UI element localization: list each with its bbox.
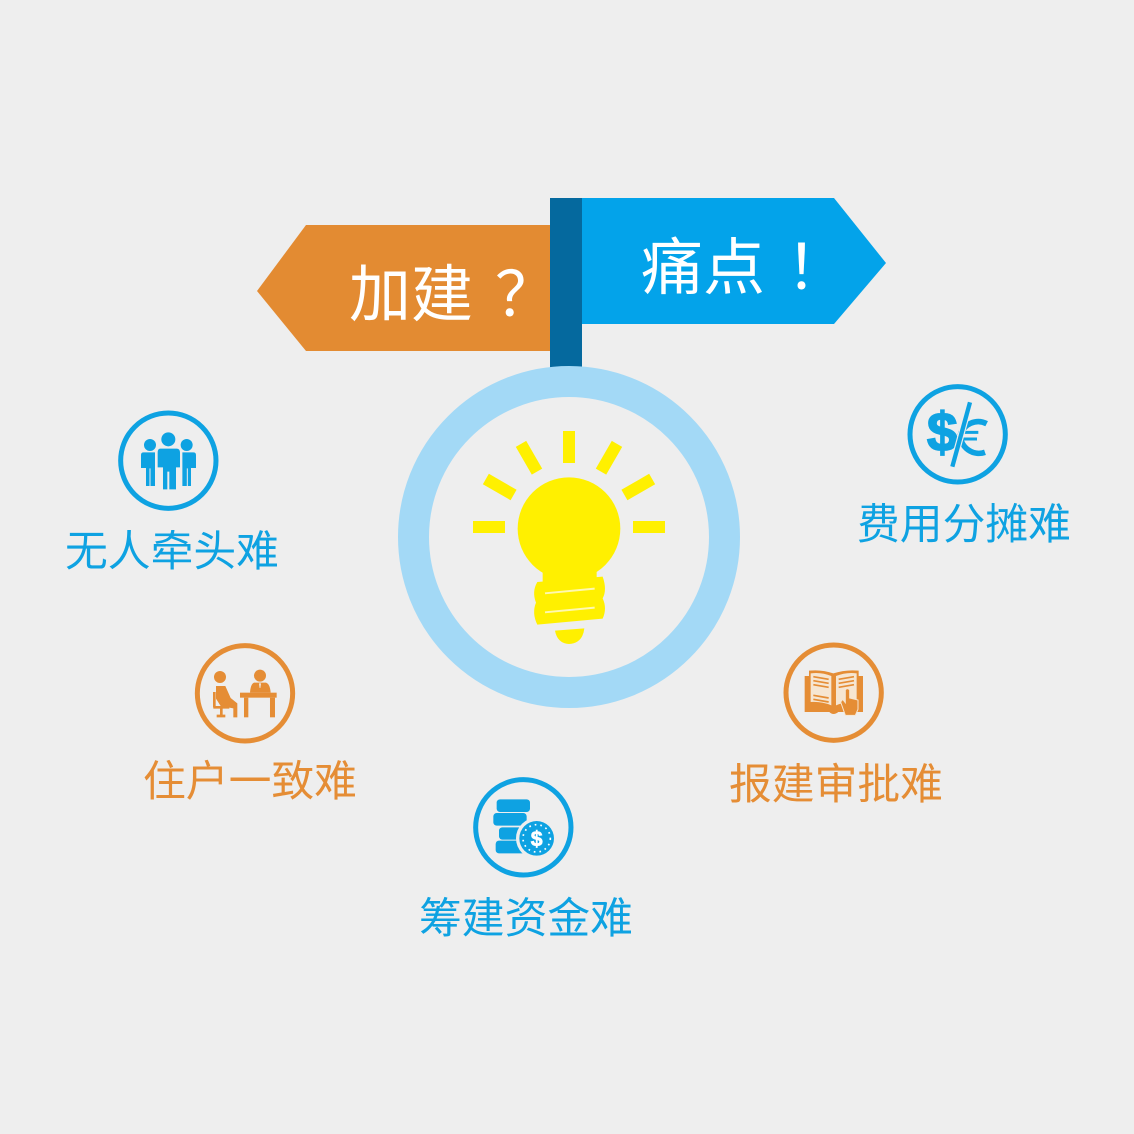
sign: blue arrow 痛点！ — [582, 198, 886, 324]
sign: blue arrow 痛点！: ！ — [786, 234, 848, 303]
sign: orange arrow 加建？: ？ — [495, 261, 557, 330]
sign: orange arrow 加建？: 加建 — [349, 261, 473, 330]
icon: light bulb — [473, 431, 665, 644]
icon: group of people — [121, 413, 216, 508]
sign: blue arrow 痛点！: 痛点 — [641, 234, 765, 303]
icon: dollar and euro symbols — [910, 387, 1005, 482]
label: 住户一致难: 住户一致难 — [143, 758, 357, 806]
item: 无人牵头难 — [65, 413, 279, 576]
item: 报建审批难 — [729, 645, 943, 809]
signpost pole — [550, 198, 582, 374]
icon: coin stack with dollar coin: $ — [531, 827, 543, 851]
label: 筹建资金难: 筹建资金难 — [419, 895, 633, 943]
label: 报建审批难: 报建审批难 — [729, 761, 943, 809]
icon: two people at a desk — [197, 646, 293, 741]
icon: open book with pointing hand — [786, 645, 881, 740]
item: 费用分摊难 — [857, 387, 1071, 549]
sign: orange arrow 加建？ — [257, 225, 557, 351]
item: 住户一致难 — [143, 646, 357, 806]
item: 筹建资金难 — [419, 780, 633, 943]
ring around light bulb — [414, 382, 724, 692]
label: 无人牵头难: 无人牵头难 — [65, 528, 279, 576]
label: 费用分摊难: 费用分摊难 — [857, 501, 1071, 549]
icon: dollar and euro symbols: $ — [927, 401, 958, 463]
icon: coin stack with dollar coin — [476, 780, 571, 875]
